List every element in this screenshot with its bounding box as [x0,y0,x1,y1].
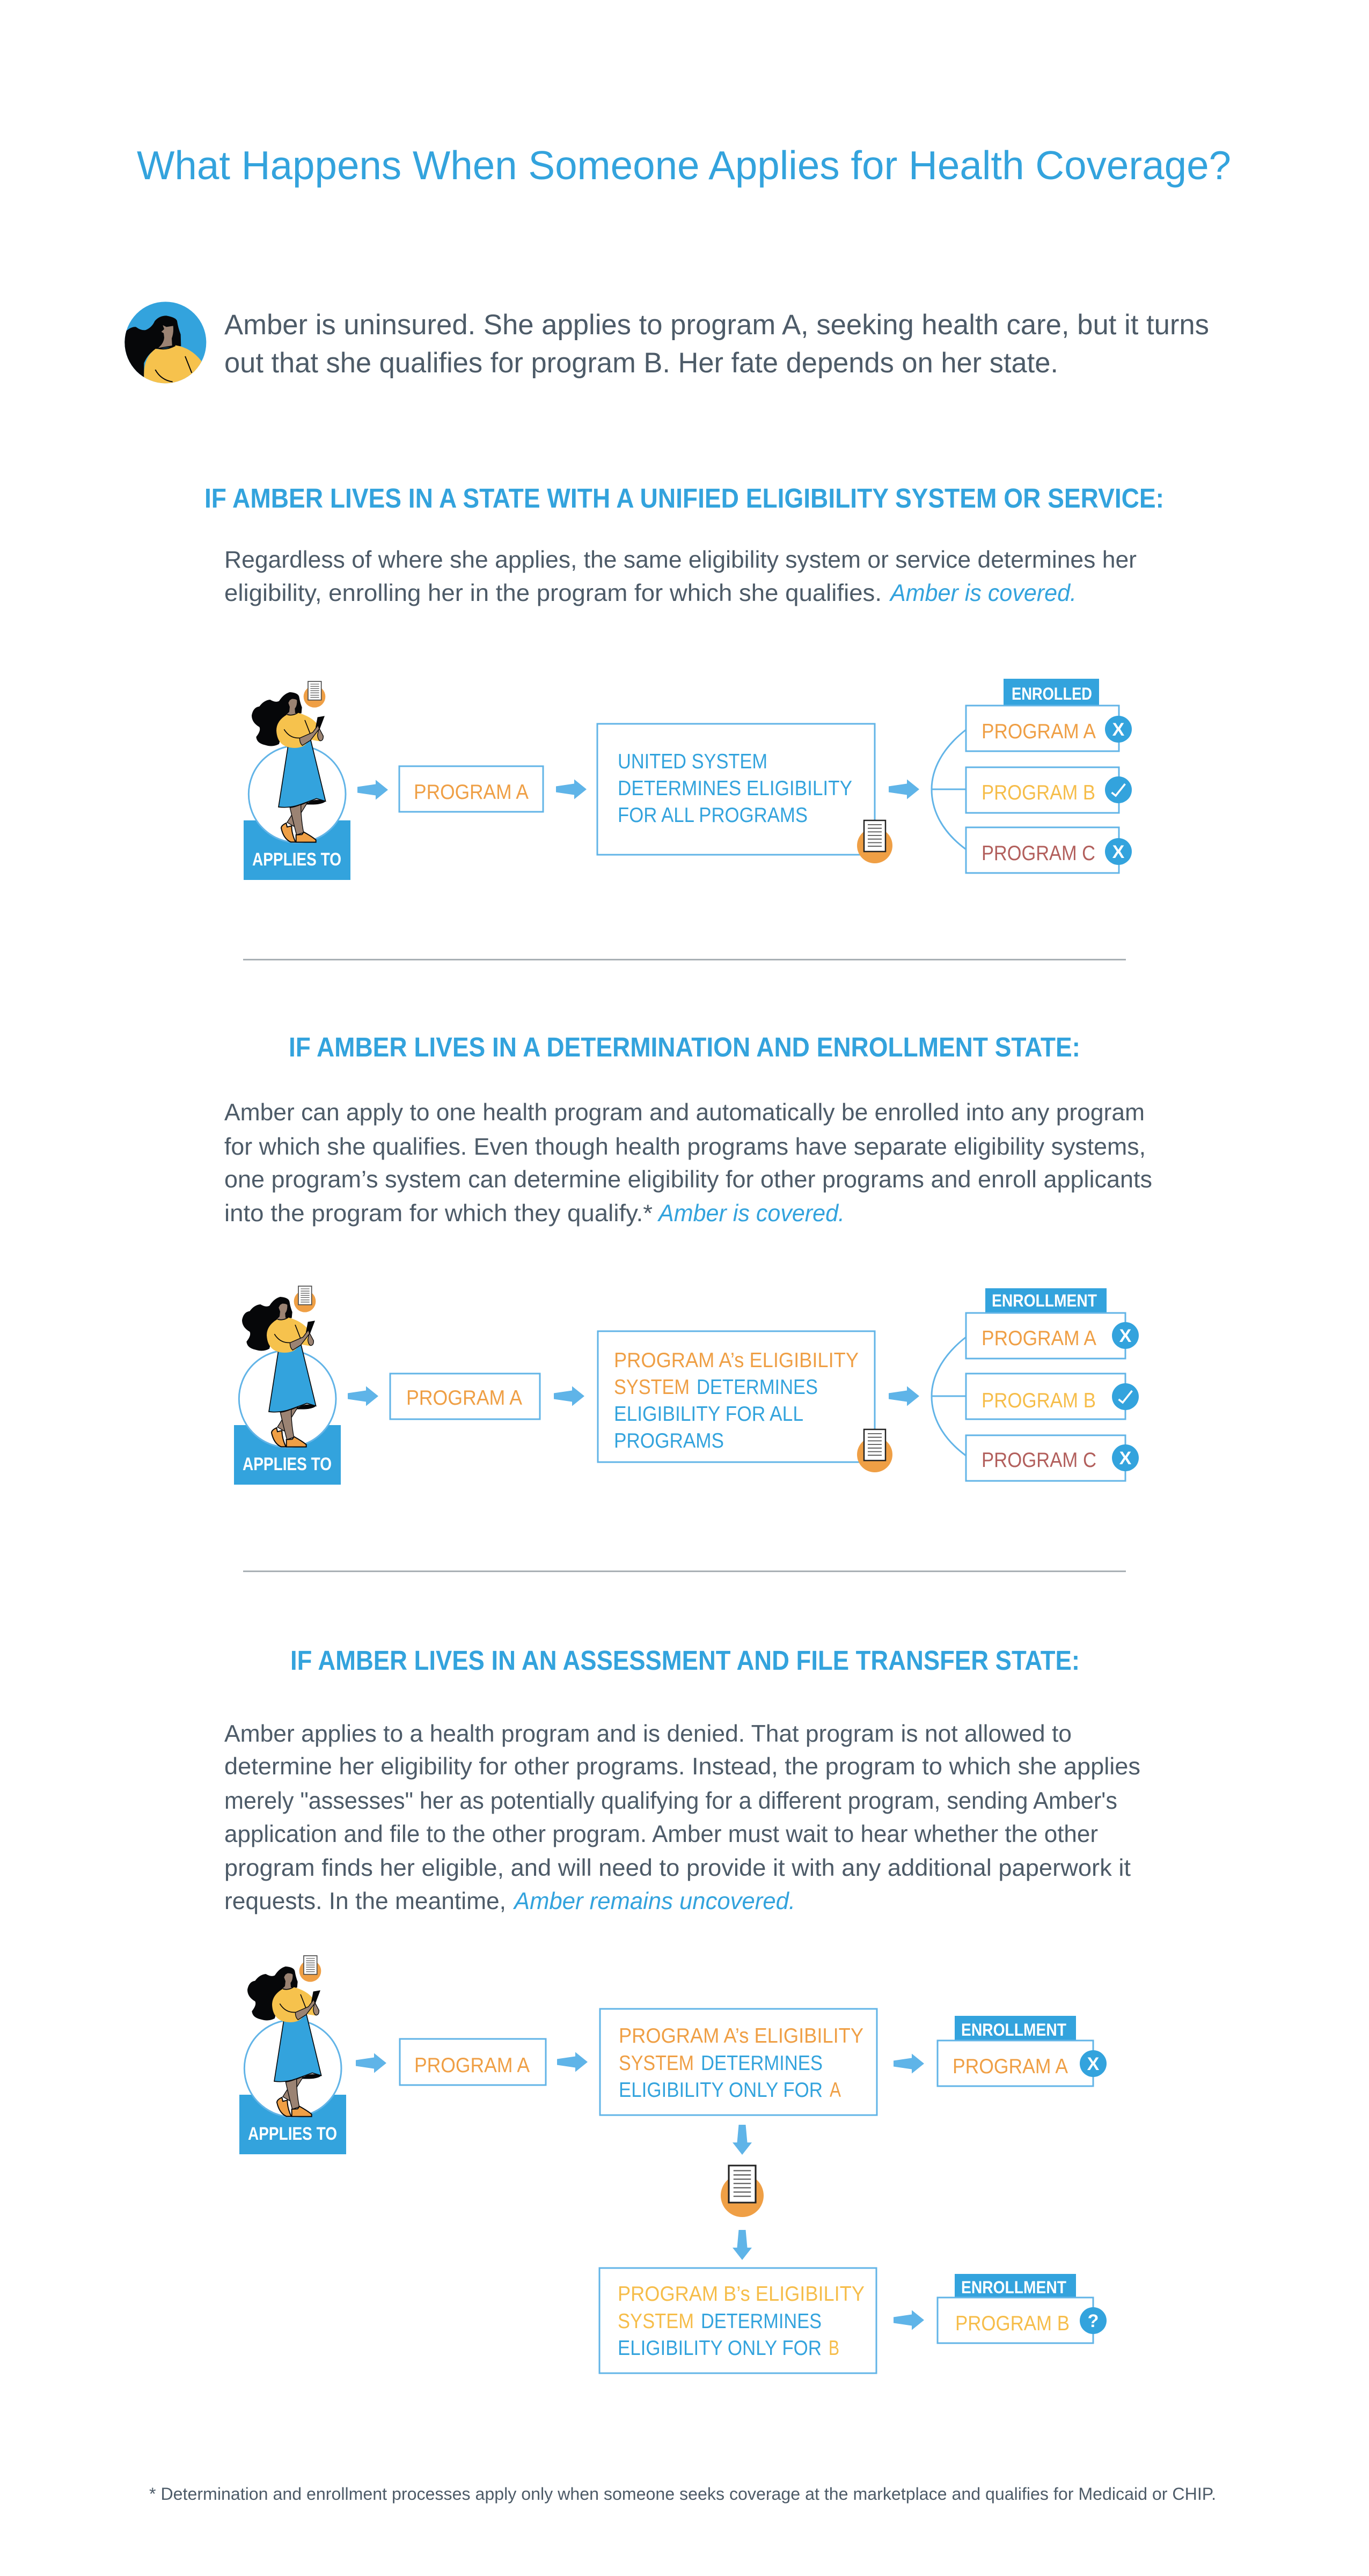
box: program A eligibility only: SYSTEM [619,2052,694,2075]
box: program A eligibility system: SYSTEM [614,1376,690,1399]
box: program A eligibility only [600,2009,877,2115]
tab: enrolled: ENROLLED [1012,684,1092,703]
box: program A eligibility system: ELIGIBILITY FOR ALL [614,1403,803,1426]
bracket connector [932,730,966,849]
box: united system: DETERMINES ELIGIBILITY [618,777,852,800]
outcome: program C: PROGRAM C [982,842,1095,865]
box: program A [400,2039,546,2085]
outcome: program B [938,2298,1107,2343]
arrow [357,780,388,799]
outcome: program B: PROGRAM B [982,781,1095,804]
applies to box: APPLIES TO [252,849,341,870]
box: program A [390,1374,540,1419]
diagram: assessment and file transfer [239,1956,1107,2373]
arrow: down to document [733,2125,752,2155]
arrow [894,2054,924,2073]
box: program B eligibility only: B [829,2337,839,2360]
tab: enrollment A: ENROLLMENT [961,2020,1066,2039]
outcome: program A [966,706,1132,751]
applies to box [234,1425,341,1485]
tab: enrollment: ENROLLMENT [992,1291,1097,1310]
box: program A: PROGRAM A [414,2054,530,2077]
outcome: program A: PROGRAM A [953,2055,1068,2078]
text block: determination and enrollment: one program’s system can determine eligibility for other programs and enroll applicants [224,1166,1152,1193]
outcome: program A: X [1119,1326,1132,1346]
arrow [889,779,919,799]
text block: determination and enrollment: Amber is covered. [657,1200,845,1227]
text block: assessment and file transfer [224,1721,1140,1914]
outcome: program A: X [1087,2054,1100,2074]
text block: assessment and file transfer: application and file to the other program. Amber must wait to hear whether the other [224,1821,1098,1847]
text block: determination and enrollment: Amber can apply to one health program and automatically be enrolled into any program [224,1099,1145,1126]
text block: unified system: eligibility, enrolling her in the program for which she qualifies. [224,580,882,606]
box: program A eligibility only: A [830,2079,841,2102]
outcome: program A [938,2041,1107,2086]
outcome: program A: PROGRAM A [982,720,1096,743]
arrow [889,1386,919,1406]
box: program A eligibility system: PROGRAM A’s ELIGIBILITY [614,1349,859,1372]
applies to box: APPLIES TO [248,2124,337,2144]
box: united system [597,724,875,855]
outcome: program B: PROGRAM B [982,1389,1096,1412]
box: program A eligibility system: DETERMINES [697,1376,818,1399]
box: program B eligibility only: ELIGIBILITY ONLY FOR [618,2337,822,2360]
arrow [556,779,587,799]
figure: Amber with phone [244,1956,341,2117]
text block: determination and enrollment [224,1099,1152,1227]
tab: enrolled [1004,679,1099,706]
footnote: * Determination and enrollment processes apply only when someone seeks coverage at the marketplace and qualifies for Medicaid or CHIP. [149,2484,1216,2504]
outcome: program C [966,827,1132,873]
box: program A eligibility system: PROGRAMS [614,1429,724,1452]
intro text: Amber is uninsured. She applies to program A, seeking health care, but it turns [224,309,1209,341]
arrow [554,1386,584,1406]
outcome: program B [966,767,1132,813]
text block: assessment and file transfer: requests. In the meantime, [224,1888,506,1914]
arrow: down to program B system [733,2230,752,2260]
text block: unified system: Amber is covered. [889,580,1077,606]
box: program B eligibility only: DETERMINES [701,2310,822,2333]
box: program A [399,766,543,812]
box: program A: PROGRAM A [414,781,529,804]
text block: determination and enrollment: for which she qualifies. Even though health programs have separate eligibility systems, [224,1134,1146,1160]
heading: unified system: IF AMBER LIVES IN A STATE WITH A UNIFIED ELIGIBILITY SYSTEM OR SERVICE: [204,483,1164,513]
outcome: program C: X [1119,1448,1132,1469]
box: program A eligibility system [598,1331,875,1462]
arrow [348,1386,378,1406]
heading: assessment and file transfer: IF AMBER LIVES IN AN ASSESSMENT AND FILE TRANSFER STATE: [290,1645,1080,1676]
outcome: program A [966,1313,1139,1359]
box: program A eligibility only: PROGRAM A’s ELIGIBILITY [619,2024,863,2047]
box: program A eligibility only: DETERMINES [701,2052,823,2075]
arrow [894,2310,924,2330]
text block: assessment and file transfer: Amber applies to a health program and is denied. That program is not allowed to [224,1721,1072,1747]
text block: assessment and file transfer: determine her eligibility for other programs. Instead, the program to which she applies [224,1753,1140,1780]
figure: Amber with phone [239,1286,336,1447]
icon: Amber avatar [123,302,208,386]
tab: enrollment B: ENROLLMENT [961,2278,1066,2297]
box: program B eligibility only: PROGRAM B’s ELIGIBILITY [618,2283,865,2306]
diagram: unified system [244,679,1132,880]
heading: determination and enrollment: IF AMBER LIVES IN A DETERMINATION AND ENROLLMENT STATE: [289,1032,1080,1062]
box: program A: PROGRAM A [406,1386,522,1410]
box: united system: UNITED SYSTEM [618,750,767,773]
outcome: program A: PROGRAM A [982,1327,1096,1350]
arrow [356,2053,386,2073]
text block: assessment and file transfer: merely "assesses" her as potentially qualifying for a different program, sending Amber's [224,1788,1117,1814]
text block: unified system [224,547,1137,606]
icon: document [857,1429,892,1472]
outcome: program B: ? [1088,2311,1099,2331]
intro text: out that she qualifies for program B. Her fate depends on her state. [224,347,1058,379]
title: What Happens When Someone Applies for Health Coverage? [137,143,1231,188]
icon: document [857,820,892,863]
applies to box [239,2095,346,2154]
text block: assessment and file transfer: Amber remains uncovered. [513,1888,795,1914]
outcome: program C [966,1435,1139,1481]
outcome: program B: PROGRAM B [955,2312,1070,2335]
text block: unified system: Regardless of where she applies, the same eligibility system or service determines her [224,547,1137,573]
box: program B eligibility only [599,2268,876,2373]
diagram: determination and enrollment [234,1286,1139,1485]
text block: determination and enrollment: into the program for which they qualify.* [224,1200,653,1227]
icon: document [721,2166,764,2217]
box: program B eligibility only: SYSTEM [618,2310,694,2333]
applies to box: APPLIES TO [243,1454,332,1474]
outcome: program A: X [1112,720,1125,740]
box: united system: FOR ALL PROGRAMS [618,804,808,827]
arrow [557,2052,588,2072]
intro text [224,309,1209,379]
outcome: program C: X [1112,842,1125,862]
figure: Amber with phone [248,681,346,842]
box: program A eligibility only: ELIGIBILITY ONLY FOR [619,2079,823,2102]
text block: assessment and file transfer: program finds her eligible, and will need to provide it with any additional paperwork it [224,1855,1131,1881]
outcome: program B [966,1374,1139,1419]
outcome: program C: PROGRAM C [982,1449,1096,1472]
applies to box [244,820,350,880]
bracket connector [932,1337,966,1456]
